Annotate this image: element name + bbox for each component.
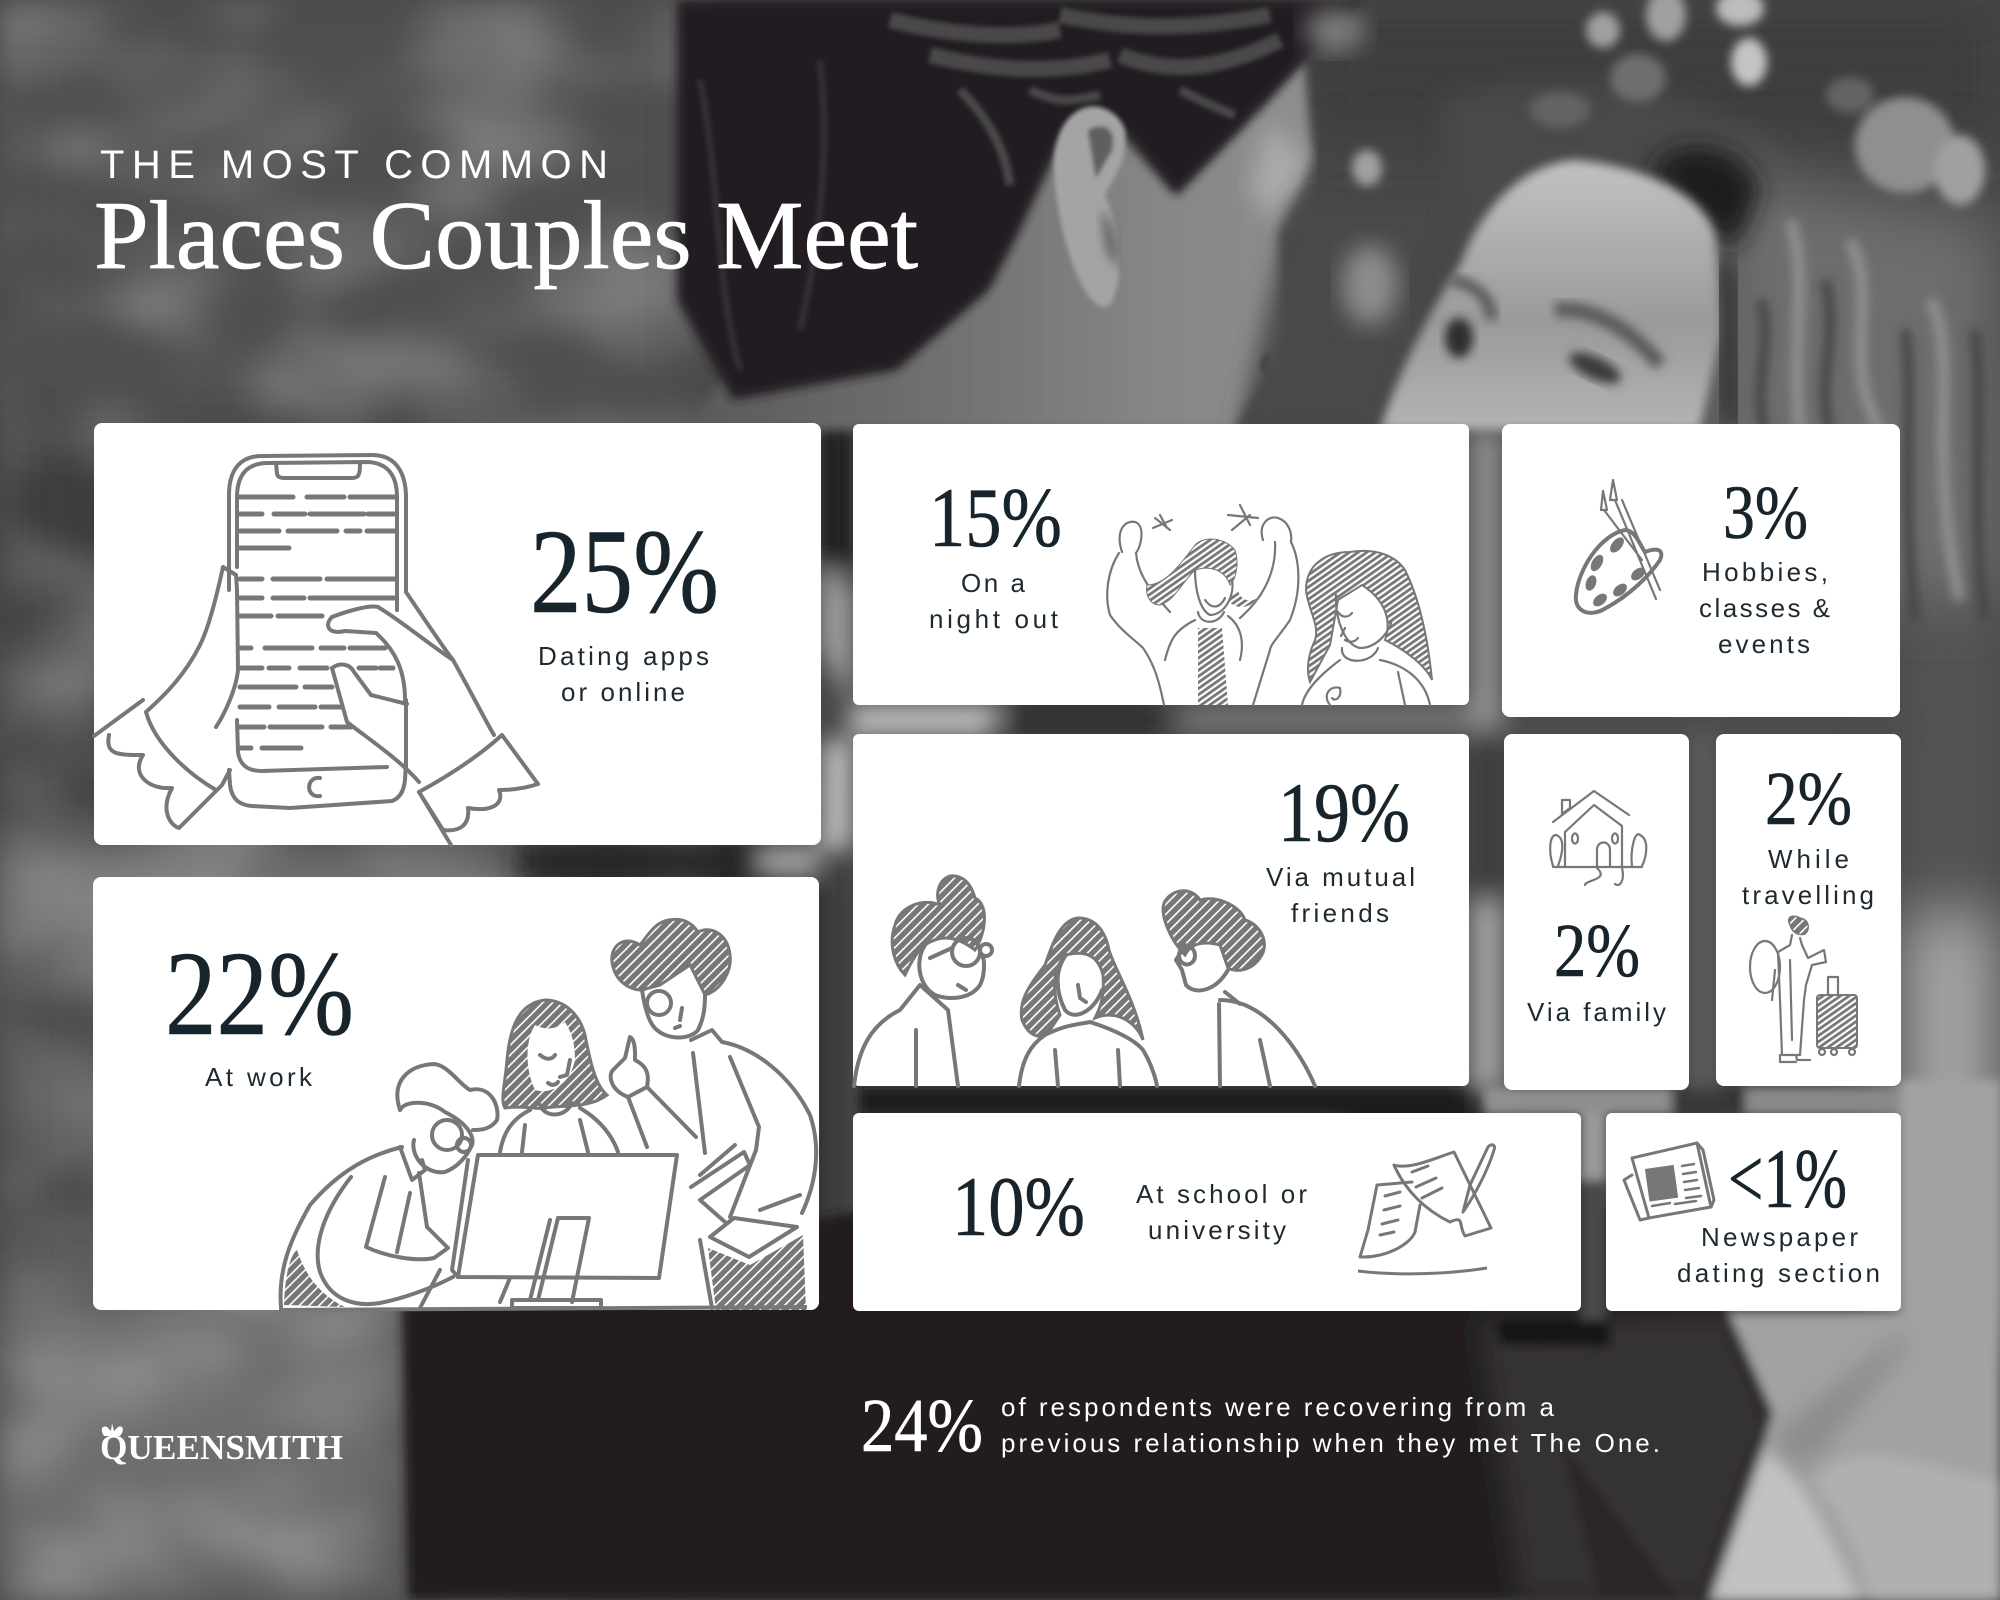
label: at school or university: At school or (1136, 1179, 1307, 1209)
blouse (1710, 1080, 2000, 1600)
label: on a night out: night out (929, 604, 1059, 634)
label: newspaper dating section (1677, 1222, 1880, 1288)
jacket (402, 1080, 2000, 1600)
label: at school or university: university (1148, 1215, 1286, 1245)
footnote text: previous relationship when they met The One. (1001, 1428, 1660, 1458)
label: dating apps or online: Dating apps (538, 641, 709, 671)
stat: 3%: 3% (1723, 471, 1808, 555)
label: on a night out (929, 568, 1059, 634)
right man (612, 919, 730, 995)
icon: hands holding a phone (94, 455, 538, 845)
panel: at work 22% (93, 877, 819, 1310)
bokeh lights (1352, 0, 1985, 205)
icon: house (1550, 791, 1646, 885)
label: dating apps or online: or online (561, 677, 685, 707)
left hand (146, 567, 237, 712)
panel: school or university 10% (853, 1113, 1581, 1311)
illustration: colleagues at a computer (279, 919, 816, 1310)
footnote text (1001, 1392, 1660, 1458)
label: hobbies, classes and events: events (1718, 629, 1810, 659)
gap colours between lower cards (1470, 1088, 1480, 1115)
label: while travelling: travelling (1742, 880, 1874, 910)
seated colleague (281, 1147, 402, 1307)
ground (279, 1307, 807, 1310)
label: while travelling: While (1768, 844, 1849, 874)
stat: less than 1%: <1% (1728, 1132, 1847, 1226)
man head: skin and hair (677, 0, 1365, 430)
label: dating apps or online (538, 641, 709, 707)
illustration: traveller with suitcase (1750, 916, 1857, 1062)
illustration: two women celebrating (1107, 505, 1432, 705)
label: hobbies, classes and events: Hobbies, (1702, 557, 1828, 587)
right hand (406, 592, 494, 735)
panel: night out 15% (853, 424, 1469, 705)
label: newspaper dating section: Newspaper (1701, 1222, 1858, 1252)
label: at work: At work (205, 1062, 313, 1092)
panel: hobbies 3% (1502, 424, 1900, 717)
panel: while travelling 2% (1716, 734, 1901, 1086)
icon: paint palette (1576, 480, 1661, 613)
stat: 25%: 25% (530, 505, 719, 639)
stat: 19%: 19% (1278, 766, 1410, 860)
heading kicker: THE MOST COMMON (100, 143, 608, 187)
stat: 2% via family: 2% (1554, 909, 1640, 993)
label: hobbies, classes and events: classes & (1699, 593, 1830, 623)
label: via mutual friends (1266, 862, 1415, 928)
stat: 2% while travelling: 2% (1765, 757, 1852, 841)
woman hair and face (1240, 84, 2000, 620)
monitor (458, 1155, 677, 1278)
footnote stat: 24%: 24% (861, 1384, 983, 1468)
footnote text: of respondents were recovering from a (1001, 1392, 1555, 1422)
panel: dating apps 25% (94, 423, 821, 845)
panel: via family 2% (1504, 734, 1689, 1090)
label: newspaper dating section: dating section (1677, 1258, 1880, 1288)
illustration: three friends chatting (854, 876, 1315, 1086)
label: on a night out: On a (961, 568, 1026, 598)
hair strands (700, 15, 1280, 370)
text lines (240, 497, 395, 748)
label: via mutual friends: friends (1291, 898, 1389, 928)
label: via family: Via family (1527, 997, 1666, 1027)
label: at school or university (1136, 1179, 1307, 1245)
label: while travelling (1742, 844, 1874, 910)
woman in middle (503, 1000, 607, 1108)
stat: 10%: 10% (952, 1160, 1085, 1254)
main title: Places Couples Meet (94, 182, 918, 290)
icon: papers and pen (1358, 1145, 1495, 1274)
logo: Queensmith: QUEENSMITH (100, 1428, 343, 1467)
stat: 15%: 15% (929, 471, 1062, 565)
icon: crown (102, 1423, 123, 1436)
label: via mutual friends: Via mutual (1266, 862, 1415, 892)
panel: newspaper dating section <1% (1606, 1113, 1901, 1311)
hands and arms behind cards (820, 740, 853, 850)
icon: newspaper (1624, 1143, 1714, 1220)
garden mottling (0, 0, 720, 1600)
panel: mutual friends 19% (853, 734, 1469, 1086)
label: hobbies, classes and events (1699, 557, 1830, 659)
stat: 22%: 22% (165, 927, 354, 1061)
